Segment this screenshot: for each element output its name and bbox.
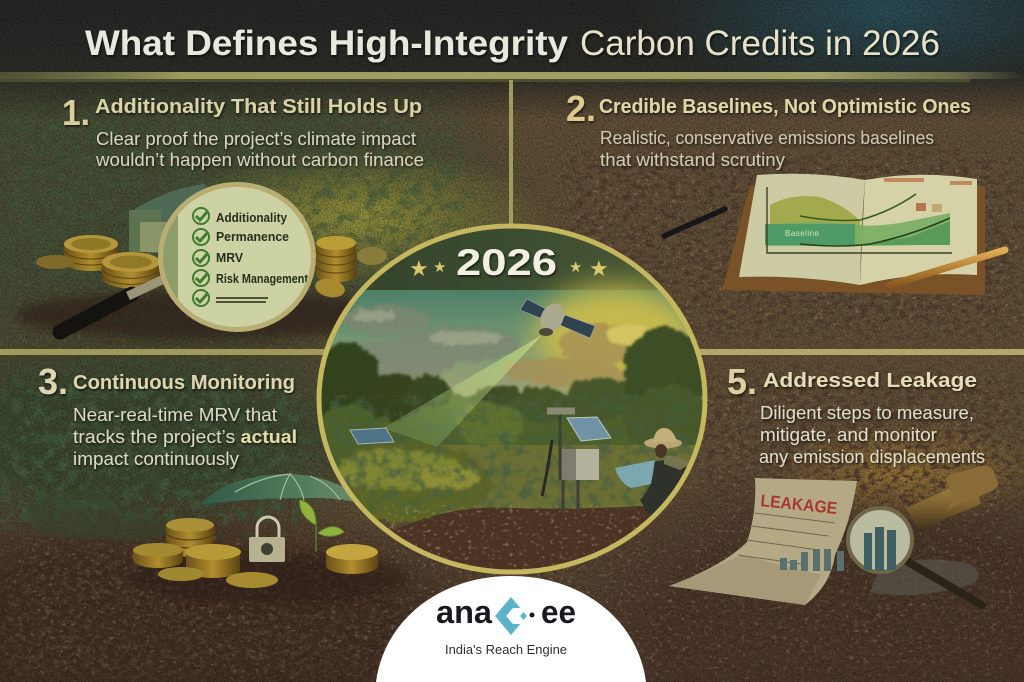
number 1: 1. [62,92,90,133]
stars: ★ [409,256,429,281]
body text 5 [759,402,985,467]
logo badge [376,576,646,682]
heading 1: Additionality That Still Holds Up [95,96,422,118]
body text 5: mitigate, and monitor [760,424,937,445]
circle gold ring [319,226,705,572]
logo wordmark: ana [436,594,492,630]
body text 3: impact continuously [73,448,240,469]
magnifier handle [60,294,132,332]
magnifier over bar chart [848,508,982,605]
body text 5: Diligent steps to measure, [760,402,974,423]
satellite [520,299,595,338]
body text 5: any emission displacements [759,446,985,467]
panel 3: monitoring [25,361,410,604]
magnifier lens with checklist: MRV [216,250,243,265]
divider rules [0,72,1024,355]
logo wordmark: ee [541,594,576,630]
weather station [542,410,611,512]
body text 2: Realistic, conservative emissions baselines [600,127,934,148]
body text 1: wouldn’t happen without carbon finance [95,149,424,170]
number 3: 3. [38,361,68,402]
circle header band [366,228,658,290]
body text 3: Near-real-time MRV that [73,404,277,425]
person with tablet [615,428,690,522]
body text 1: Clear proof the project’s climate impact [96,128,416,149]
central circle: 2026 scene [312,224,712,580]
body text 1 [95,128,424,170]
open book with baseline chart [722,174,985,295]
open book with baseline chart: Baseline [785,229,820,238]
magnifier lens with checklist [160,185,318,335]
sky and clouds [318,285,708,400]
magnifier lens with checklist: Permanence [216,229,289,244]
heading 2: Credible Baselines, Not Optimistic Ones [599,96,971,118]
body text 3: tracks the project’s actual [73,426,297,447]
panel 1: additionality [15,92,424,339]
year label: 2026 [456,242,557,283]
icon: pen [664,209,725,236]
forest and bushes [312,327,712,580]
stars: ★ [589,256,609,281]
body text 3 [73,404,297,469]
icon: pencil [890,250,1005,285]
body text 2 [600,127,934,170]
heading 5: Addressed Leakage [763,370,977,392]
heading 3: Continuous Monitoring [73,372,295,394]
number 2: 2. [566,88,596,129]
stars: ★ [569,259,582,276]
illustration: umbrella, lock, coins, seedling [25,474,410,604]
stars [409,256,609,281]
illustration: leakage report, pipe and magnifier [669,466,998,605]
magnifier lens with checklist: Additionality [216,210,288,225]
logo tagline: India's Reach Engine [445,642,567,657]
panel 2: baselines [566,88,1005,295]
title: What Defines High-Integrity [85,24,569,63]
title: Carbon Credits in 2026 [580,24,940,63]
logo wordmark [436,594,576,635]
title [85,24,940,63]
number 5: 5. [727,361,757,402]
panel 5: leakage [669,361,998,605]
illustration: coins, folder and magnifier [15,184,395,339]
scanning beam [383,335,542,447]
illustration: leakage report, pipe and magnifier: LEAKAGE [760,491,838,518]
magnifier lens with checklist: Risk Management [216,271,309,286]
stars: ★ [433,259,446,276]
solar panel left [350,428,394,444]
body text 2: that withstand scrutiny [600,149,786,170]
